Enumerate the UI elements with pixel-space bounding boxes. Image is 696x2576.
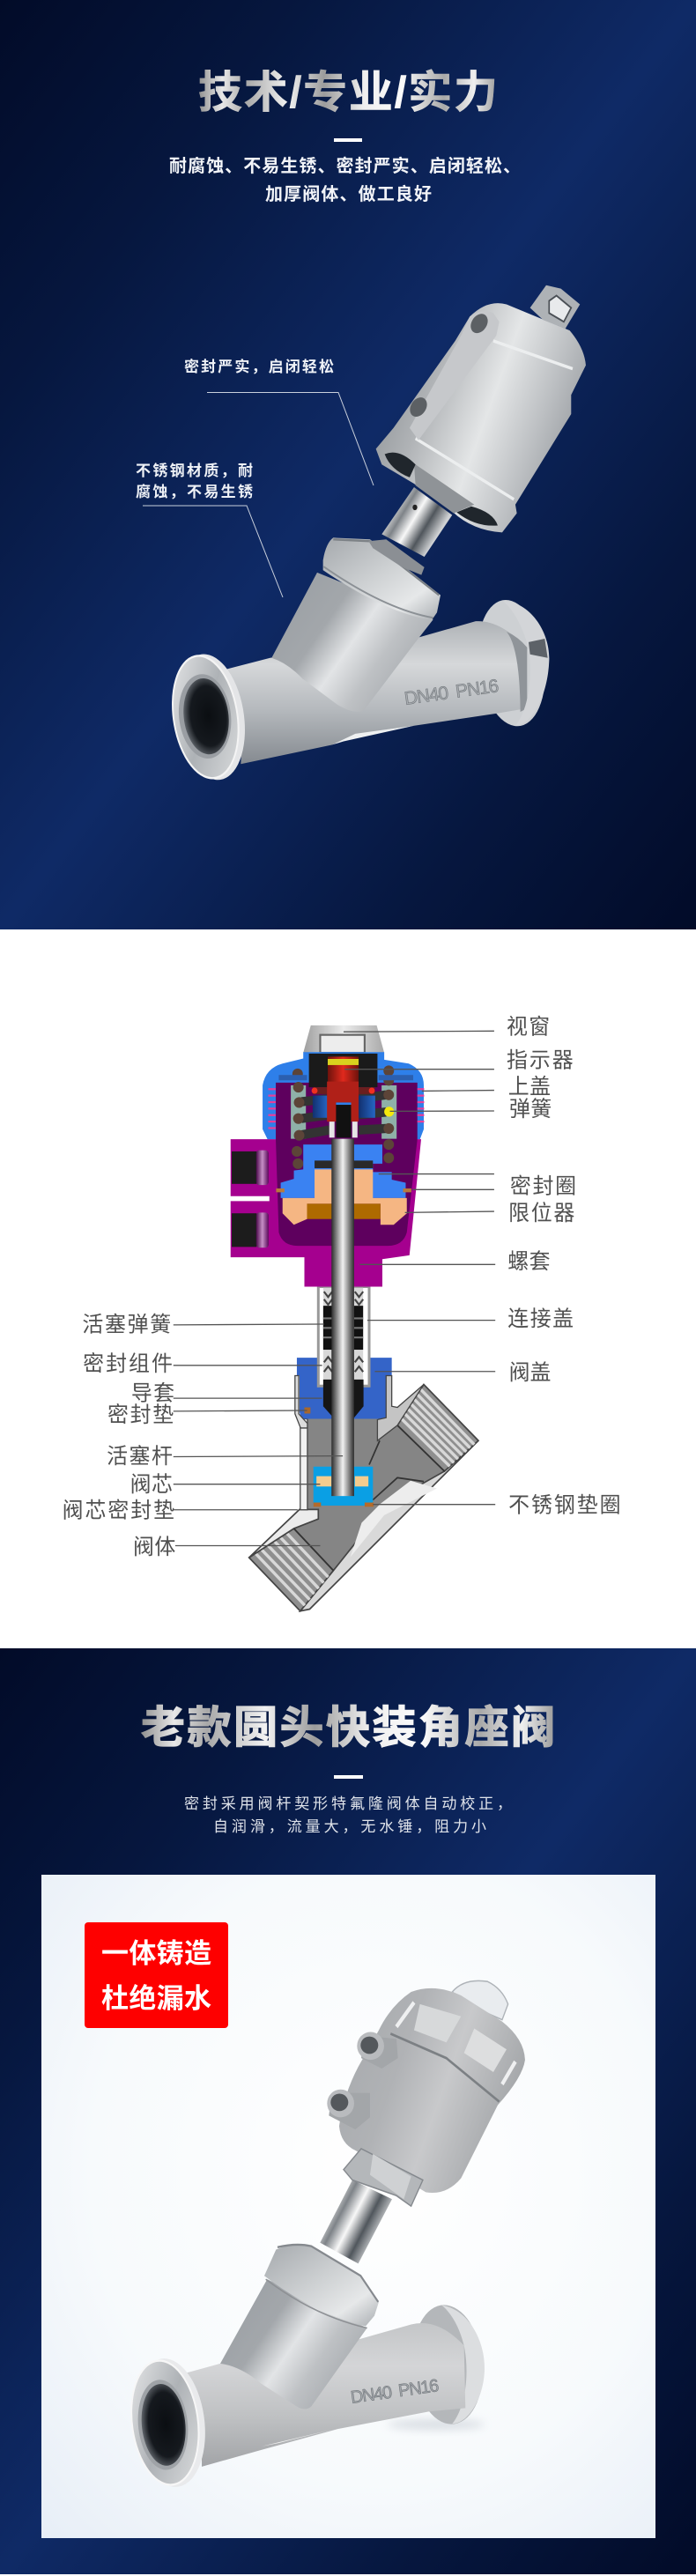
embossed marking: DN40 PN16 [403, 676, 500, 709]
red badge [85, 1922, 228, 2028]
lower bonnet body [271, 573, 433, 712]
embossed marking: DN40 PN16 [350, 2376, 441, 2408]
label: stainless washer: 不锈钢垫圈 [508, 1493, 621, 1517]
right flange [470, 594, 553, 733]
product photo: angle seat valve with cylinder actuator [164, 285, 586, 788]
sight window [452, 1980, 508, 2020]
cross-section: piston rod [331, 1139, 354, 1496]
label: connection cover: 连接盖 [507, 1307, 574, 1331]
air port upper [357, 2032, 398, 2069]
bonnet ring [323, 537, 441, 620]
title: old-style round head quick-install angle seat valve: 老款圆头快装角座阀 [141, 1703, 555, 1752]
label: valve core: 阀芯 [130, 1473, 173, 1497]
cross-section: body neck walls [295, 1376, 424, 1440]
callout: stainless steel [136, 462, 283, 597]
title divider [334, 1775, 363, 1779]
callout: sealing: 密封严实，启闭轻松 [184, 358, 334, 375]
left flange [123, 2352, 213, 2494]
label: indicator: 指示器 [507, 1048, 574, 1073]
description: 自润滑，流量大，无水锤，阻力小 [213, 1818, 486, 1835]
title divider [334, 138, 362, 142]
description: 密封采用阀杆契形特氟隆阀体自动校正， [184, 1795, 512, 1812]
callout: sealing [184, 358, 374, 485]
title: technology, expertise, strength: 技术/专业/实力 [198, 68, 498, 117]
label: piston spring: 活塞弹簧 [82, 1314, 171, 1337]
label: limiter: 限位器 [508, 1202, 574, 1225]
label: gasket: 密封垫 [107, 1403, 174, 1427]
actuator ridge lines and air ports [416, 341, 573, 500]
cross-section: spring tubes and coils [278, 1065, 413, 1169]
label: piston rod: 活塞杆 [107, 1445, 173, 1469]
panel: cross-section diagram [63, 1015, 621, 1611]
cross-section: dark inner chamber [276, 1083, 418, 1246]
label: seal assembly: 密封组件 [83, 1352, 173, 1376]
actuator details [390, 2033, 500, 2102]
label: threaded sleeve: 螺套 [507, 1250, 551, 1274]
right flange [406, 2299, 489, 2430]
red badge: 杜绝漏水 [101, 1983, 211, 2014]
actuator cylinder [376, 303, 586, 532]
stem tube [381, 487, 452, 557]
label: guide sleeve: 导套 [131, 1382, 174, 1406]
air port lower [327, 2090, 370, 2129]
cross-section: connection tube and springs [318, 1286, 369, 1386]
subtitle [169, 155, 521, 204]
cross-section: valve body [249, 1385, 478, 1611]
cross-section: valve disc [314, 1467, 374, 1506]
subtitle: 加厚阀体、做工良好 [265, 183, 432, 204]
description [184, 1795, 512, 1835]
callout: stainless steel: 不锈钢材质，耐 [136, 462, 253, 479]
cross-section: top viewing cap [303, 1025, 384, 1053]
left flange [164, 647, 255, 788]
actuator can [339, 1988, 525, 2193]
label: core seal: 阀芯密封垫 [63, 1499, 174, 1522]
product card [41, 1875, 655, 2538]
shadow under valve [388, 2419, 485, 2430]
label: spring: 弹簧 [509, 1098, 552, 1121]
cross-section: blue piston [281, 1144, 405, 1198]
cross-section: gasket [305, 1408, 310, 1413]
label: valve body: 阀体 [133, 1536, 175, 1559]
cross-section: purple cylinder body [231, 1139, 421, 1286]
cross-section: indicator assembly [309, 1054, 377, 1137]
indicator window [530, 285, 580, 329]
actuator underside opening [385, 453, 498, 526]
main pipe [223, 621, 527, 764]
stem tube [320, 2180, 392, 2263]
callout: stainless steel: 腐蚀，不易生锈 [136, 483, 253, 500]
body ring [264, 2245, 379, 2327]
lower body [220, 2279, 367, 2409]
product photo: round head valve [123, 1980, 525, 2494]
label: seal ring: 密封圈 [510, 1175, 576, 1199]
cross-section: air ports [232, 1151, 269, 1247]
cross-section: limiter [276, 1160, 411, 1225]
cross-section: guide sleeve [323, 1380, 364, 1418]
cross-section: bonnet [297, 1358, 392, 1419]
subtitle: 耐腐蚀、不易生锈、密封严实、启闭轻松、 [169, 155, 521, 176]
label: bonnet: 阀盖 [509, 1361, 551, 1385]
panel: old-style round head valve [0, 1648, 696, 2574]
red badge: 一体铸造 [101, 1938, 211, 1969]
pipe [185, 2323, 465, 2467]
cross-section: blue upper cover [263, 1052, 424, 1139]
label: viewing window: 视窗 [507, 1015, 550, 1039]
panel: technology intro [0, 0, 696, 929]
label: upper cover: 上盖 [508, 1075, 551, 1099]
hex nut [344, 2149, 423, 2206]
hex nut [368, 539, 425, 575]
